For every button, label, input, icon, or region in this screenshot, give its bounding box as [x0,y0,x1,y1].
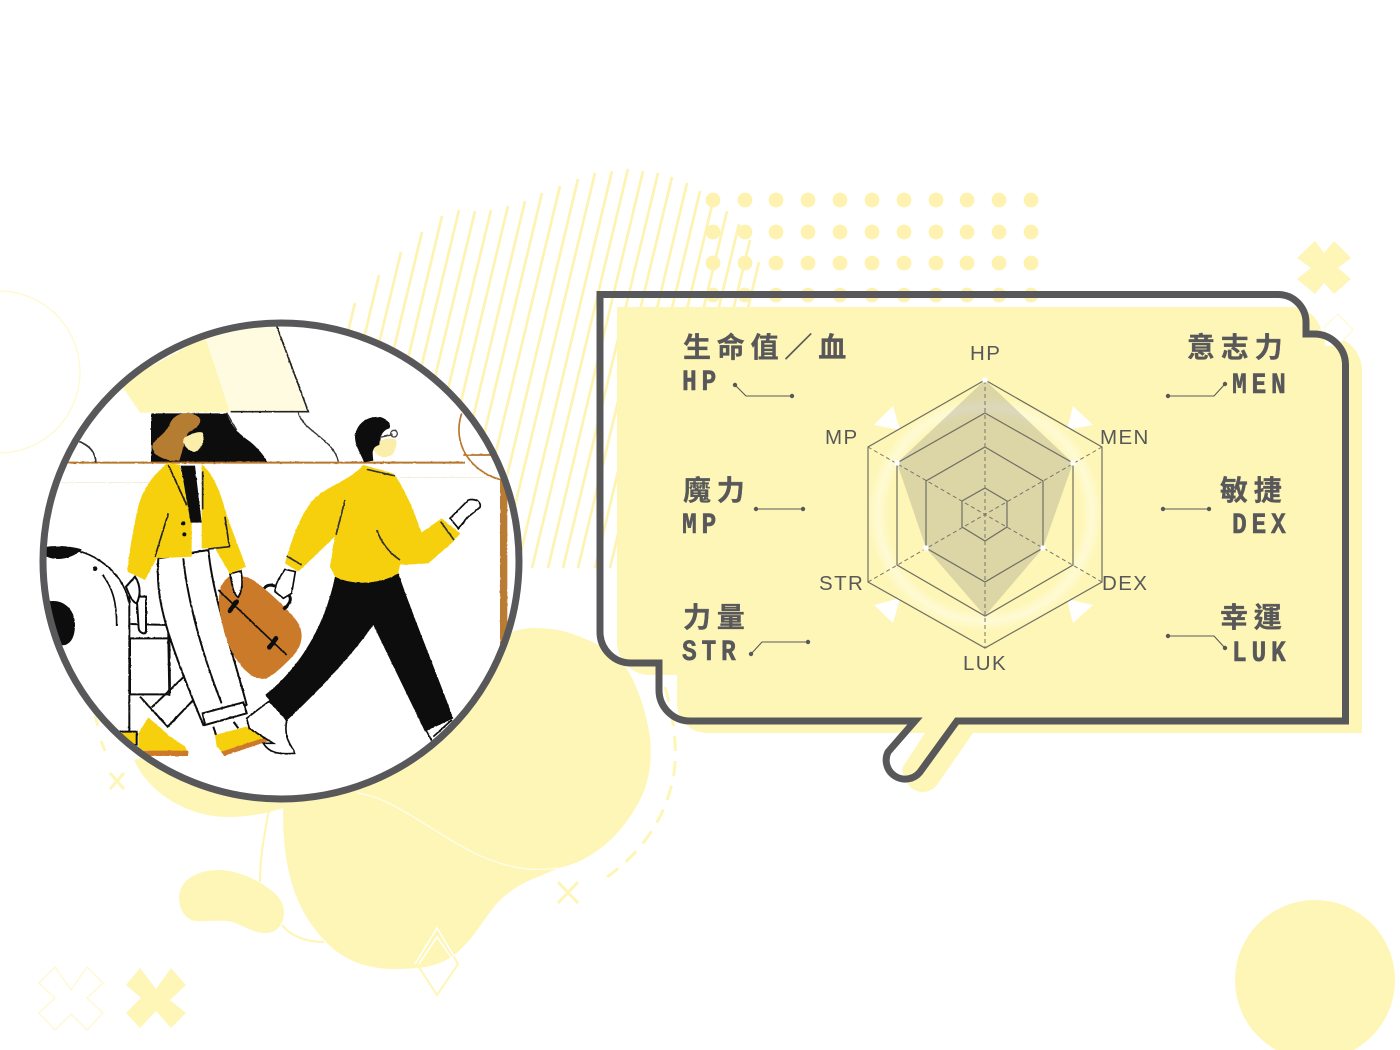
radar axis labels: MP [825,426,859,449]
illustration: seat with spots [43,546,129,645]
decorative dot grid [706,193,1038,302]
dashed yellow arc [607,687,675,877]
thin yellow connector lines [260,803,324,942]
stat label: HP [682,331,852,400]
radar dashed spokes [868,380,1102,648]
decorative diagonal stripes [290,169,759,568]
illustration: man back foot [247,701,295,754]
radar data polygon [897,380,1073,616]
illustration: man back hand [275,569,295,598]
radar data points [894,378,1076,550]
illustration: man sweater [285,465,460,583]
small diamond top right [1325,314,1353,346]
stat label: MP: 魔力 [683,475,751,506]
illustration: lamp shade [120,320,338,462]
radar chart [819,342,1150,675]
radar axis labels: STR [819,572,864,595]
speech bubble outline [600,294,1346,779]
illustration frame [43,323,519,799]
illustration: black backdrop shape [151,413,267,462]
stat label: MEN: 意志力 [1187,332,1288,363]
radar glow ring [878,407,1092,621]
stat label: LUK [1166,602,1291,671]
radar axis labels: LUK [963,652,1007,675]
radar axis labels: HP [970,342,1001,365]
stat label: DEX [1161,475,1291,543]
illustration: woman shoes [138,717,272,756]
radar axis labels: DEX [1102,572,1148,595]
small crosses [95,716,578,903]
radar corner triangles [874,406,1093,623]
illustration: man front hand [450,500,480,528]
radar axis labels [819,342,1150,675]
outline cross bottom left [39,967,103,1030]
illustration: brown bag [218,576,302,679]
stat label: STR: STR [682,636,741,670]
filled cross bottom left [126,968,186,1028]
large background blob [134,628,651,969]
stat label: STR [682,602,810,670]
small blob [179,870,284,933]
stat label: HP: 生命值／血 [683,331,852,363]
illustration: shopping bag and trolley [120,577,169,745]
illustration: woman hand [230,571,242,597]
stat label: HP: HP [682,366,721,400]
stat label: LUK: LUK [1232,637,1291,671]
stat label: STR: 力量 [683,602,751,633]
stat label: MP: MP [682,509,721,543]
stat label: DEX: 敏捷 [1220,475,1288,506]
large circle bottom right [1235,900,1395,1050]
white curve on blob [357,793,558,869]
illustration: shelf and post [60,413,507,647]
illustration: woman trousers [140,550,247,737]
double diamond [415,928,458,995]
illustration: man head [355,417,397,462]
radar axis labels: MEN [1100,426,1150,449]
illustration in circle [41,320,521,801]
illustration: woman jacket [127,463,246,580]
stat label: LUK: 幸運 [1220,602,1288,633]
cross top right [1297,241,1351,294]
stat label: MEN: MEN [1232,369,1291,403]
illustration: woman head [152,413,204,461]
stat label: DEX: DEX [1232,509,1291,543]
stat label: MP [682,475,805,543]
illustration: man trousers [265,573,453,732]
stat label: MEN [1166,332,1291,403]
thin outline circle left [0,291,80,453]
radar hexagon grid [868,380,1102,648]
speech bubble fill [617,307,1362,792]
